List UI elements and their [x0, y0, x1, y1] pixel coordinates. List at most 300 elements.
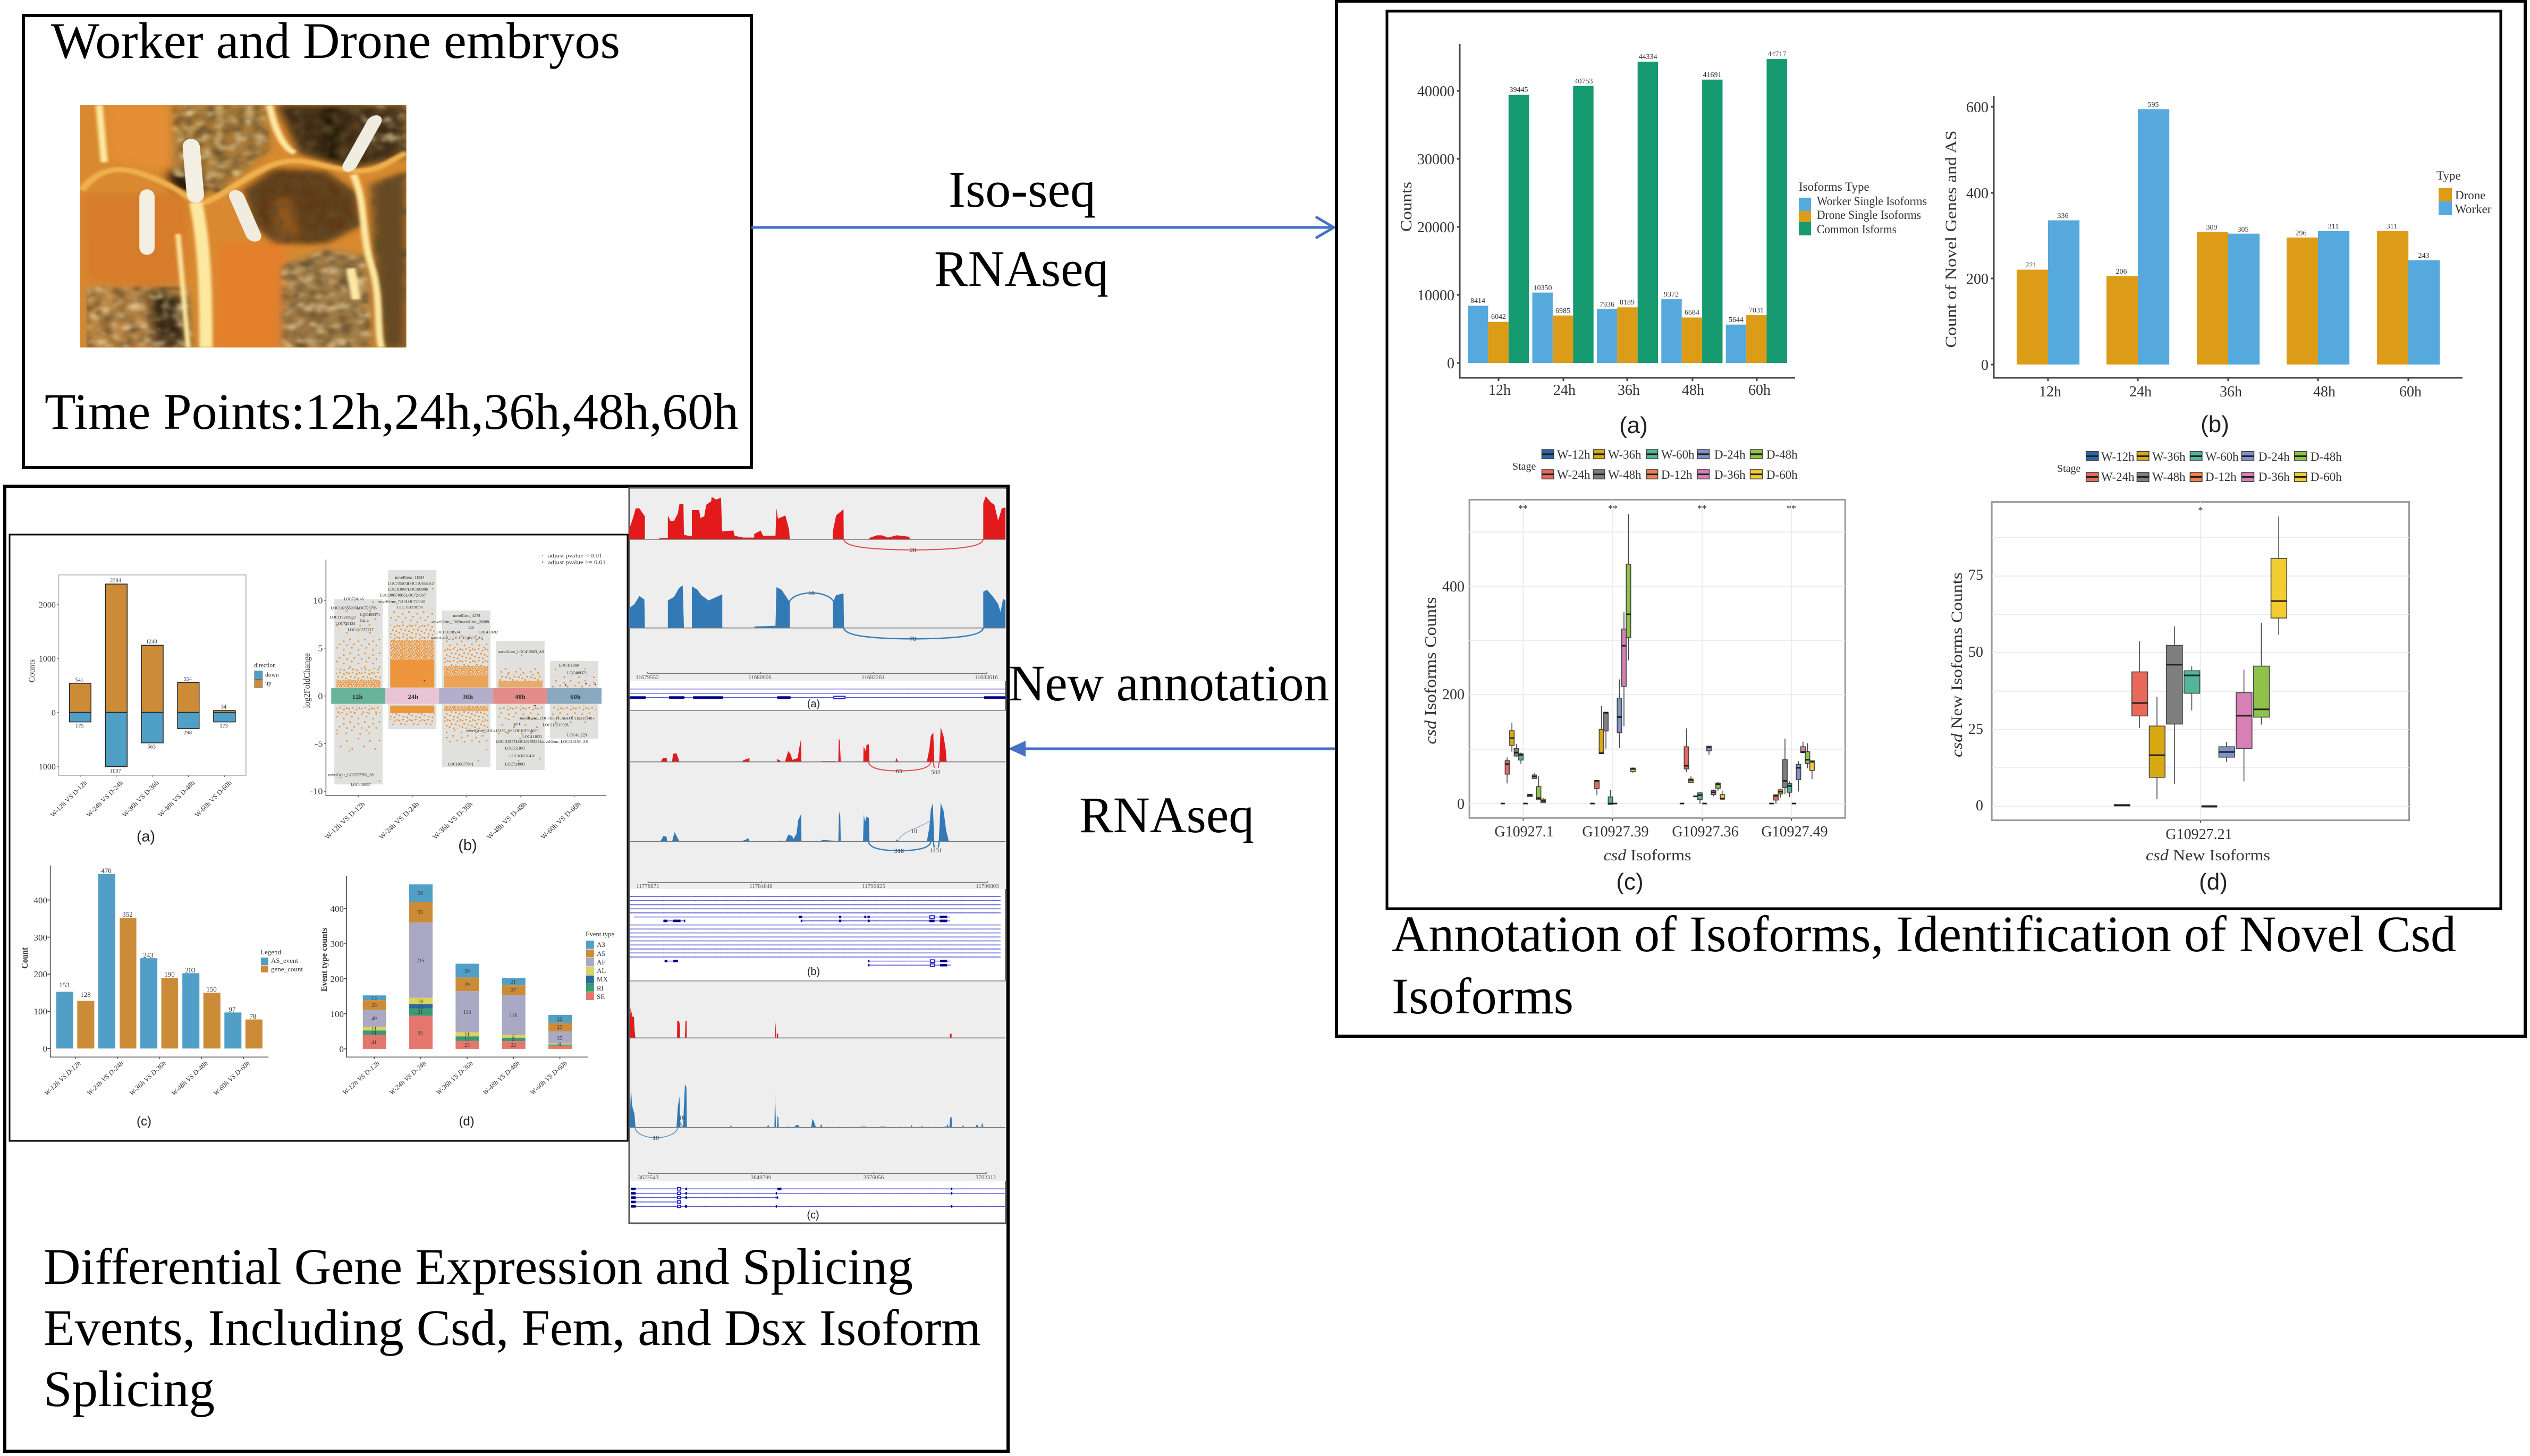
IGV a: sashimi plot csd: 18 [808, 589, 815, 597]
legend: stage c: W-24h [1557, 468, 1590, 481]
chart b: novel genes and AS: 600 [1966, 99, 1989, 116]
chart d: event type counts stacked bars: 12 [464, 1036, 470, 1042]
chart b: volcano scatter of log2FoldChange: -10 [310, 786, 323, 797]
IGV a: sashimi plot csd: 11679552 [636, 674, 659, 681]
chart b: volcano scatter of log2FoldChange: W-12h VS D-12h [323, 800, 367, 841]
IGV c: sashimi plot dsx: 16 [679, 1114, 685, 1121]
chart d: event type counts stacked bars: W-36h VS D-36h [434, 1059, 475, 1096]
legend: type: Type [2436, 169, 2461, 182]
IGV a: sashimi plot csd: 11682261 [861, 674, 885, 681]
legend: stage c: W-60h [1661, 448, 1695, 461]
chart d: event type counts stacked bars: 39 [464, 969, 470, 975]
chart a: up and down counts: 173 [219, 723, 228, 729]
chart a: isoform counts by type: 39445 [1509, 86, 1528, 94]
IGV b: sashimi plot fem: 11790825 [862, 883, 885, 890]
chart c: AS events and gene counts: 243 [143, 951, 154, 959]
IGV c: sashimi plot dsx [629, 1008, 1005, 1221]
chart d: event type counts stacked bars: 12 [418, 1004, 423, 1010]
chart b: novel genes and AS: Count of Novel Genes and AS [1942, 131, 1960, 348]
legend: stage d: D-24h [2258, 450, 2290, 463]
chart d: csd new isoforms boxplot: 25 [1968, 721, 1983, 738]
text: annotation caption: Annotation of Isoforms, Identification of Novel Csd [1392, 905, 2456, 962]
chart b: novel genes and AS: 200 [1966, 271, 1989, 287]
chart a: up and down counts: 34 [221, 705, 226, 710]
legend: AS event and gene count: gene_count [271, 965, 303, 973]
IGV b: sashimi plot fem: 11796803 [976, 883, 999, 890]
IGV a: sashimi plot csd: (a) [807, 698, 820, 710]
chart a: isoform counts by type: 8189 [1620, 299, 1635, 307]
gene labels: TpnT [512, 722, 521, 726]
chart b: volcano scatter of log2FoldChange: 48h [515, 693, 526, 700]
gene labels: LOC411023 [522, 735, 543, 739]
chart c: AS events and gene counts: Count [20, 947, 30, 969]
chart a: up and down counts: 0 [52, 708, 56, 717]
chart c: csd isoforms boxplot: G10927.39 [1582, 824, 1649, 840]
chart d: event type counts stacked bars: 39 [464, 982, 470, 988]
chart d: event type counts stacked bars: 215 [417, 958, 424, 964]
chart b: novel genes and AS: 595 [2148, 101, 2159, 109]
gene labels: LOC113218776 [397, 605, 423, 610]
IGV c: sashimi plot dsx: 3623543 [638, 1174, 659, 1181]
legend: event type: MX [597, 975, 608, 983]
chart d: event type counts stacked bars: 13 [371, 995, 377, 1001]
chart a: up and down counts: W-12h VS D-12h [48, 778, 89, 819]
text: differential expression caption: Splicing [44, 1360, 215, 1417]
label: RNAseq upper: RNAseq [934, 240, 1109, 297]
chart a: isoform counts by type: 44334 [1639, 53, 1657, 61]
chart d: event type counts stacked bars: 300 [331, 939, 344, 949]
chart c: csd isoforms boxplot: ** [1787, 503, 1796, 514]
gene labels: novelGene_LOC728514_ASLOC113219248 [520, 716, 593, 721]
chart b: novel genes and AS: 305 [2237, 226, 2249, 234]
legend: type: Worker [2455, 202, 2492, 216]
chart c: AS events and gene counts: W-60h VS D-60h [211, 1059, 251, 1097]
chart d: event type counts stacked bars: 11 [464, 1032, 470, 1038]
chart a: isoform counts by type: 20000 [1417, 219, 1454, 236]
chart c: AS events and gene counts: 352 [122, 910, 133, 918]
legend: stage c: D-12h [1661, 468, 1693, 481]
chart a: up and down counts: 1000 [39, 763, 56, 772]
chart c: csd isoforms boxplot: ** [1608, 503, 1618, 514]
gene labels: LOC726124 [335, 622, 356, 626]
gene labels: novelGene_LOC552709_AS [328, 773, 374, 777]
chart c: AS events and gene counts: W-12h VS D-12h [43, 1059, 82, 1097]
legend: stage d: Stage [2057, 463, 2081, 475]
chart b: volcano scatter of log2FoldChange: 0 [318, 691, 323, 701]
legend: event type: SE [597, 993, 605, 1001]
legend: AS event and gene count: AS_event [271, 956, 298, 964]
chart d: csd new isoforms boxplot: csd New Isoforms Counts [1948, 572, 1966, 757]
chart a: isoform counts by type: 7031 [1749, 307, 1764, 315]
gene labels: Eth [468, 625, 474, 630]
chart b: novel genes and AS: 36h [2220, 384, 2242, 400]
legend: stage d: W-12h [2101, 450, 2135, 463]
IGV b: sashimi plot fem: 502 [931, 768, 941, 776]
chart c: AS events and gene counts: 97 [229, 1005, 236, 1013]
G10927.49 [1774, 739, 1814, 804]
legend: event type: A3 [597, 941, 605, 949]
gene labels: LOC551883 [505, 747, 525, 751]
chart c: csd isoforms boxplot: G10927.1 [1494, 824, 1554, 840]
chart d: event type counts stacked bars [320, 876, 614, 1129]
chart c: csd isoforms boxplot: G10927.36 [1672, 824, 1739, 840]
chart d: event type counts stacked bars: 116 [510, 1013, 517, 1019]
chart a: isoform counts by type: 9372 [1664, 291, 1679, 299]
IGV a: sashimi plot csd: 11683616 [975, 674, 998, 681]
chart b: novel genes and AS: 12h [2039, 384, 2061, 400]
chart d: event type counts stacked bars: 7 [512, 1034, 514, 1040]
legend: event type: A5 [597, 950, 605, 958]
chart d: csd new isoforms boxplot: G10927.21 [2165, 826, 2232, 843]
gene labels: LOC409371 [567, 671, 587, 675]
gene labels: LOC409371 [360, 613, 380, 617]
chart d: event type counts stacked bars: 27 [511, 988, 516, 994]
IGV a: sashimi plot csd [629, 496, 1005, 710]
chart c: csd isoforms boxplot: 400 [1442, 579, 1465, 595]
text: annotation caption [1392, 905, 2456, 1025]
chart c: AS events and gene counts: W-36h VS D-36h [128, 1059, 167, 1097]
chart c: csd isoforms boxplot: 0 [1457, 796, 1465, 812]
chart c: AS events and gene counts: W-24h VS D-24h [85, 1059, 125, 1097]
chart b: volcano scatter of log2FoldChange [303, 553, 606, 841]
chart c: csd isoforms boxplot: ** [1697, 503, 1707, 514]
legend: event type: AF [597, 958, 606, 966]
gene labels: LOC724993 [505, 763, 525, 766]
legend: stage d: W-36h [2152, 450, 2186, 463]
chart a: isoform counts by type: 40753 [1574, 78, 1593, 86]
chart b: novel genes and AS: 24h [2129, 384, 2152, 400]
chart b: volcano scatter of log2FoldChange: log2FoldChange [303, 653, 312, 708]
legend: event type [586, 930, 614, 1001]
chart d: event type counts stacked bars: 8 [558, 1042, 561, 1048]
chart a: isoform counts by type: 60h [1748, 382, 1771, 399]
legend: isoforms type: Worker Single Isoforms [1817, 194, 1927, 208]
chart b: volcano scatter of log2FoldChange: W-36h VS D-36h [431, 800, 474, 841]
chart a: up and down counts: W-36h VS D-36h [121, 778, 160, 819]
legend: stage c: W-36h [1608, 448, 1641, 461]
chart d: event type counts stacked bars: 118 [463, 1010, 471, 1015]
gene labels: LOC411223 [567, 733, 587, 737]
chart b: novel genes and AS: 296 [2296, 230, 2306, 238]
gene labels: novelGene_4278 [453, 614, 480, 618]
chart d: event type counts stacked bars: 9 [512, 1037, 514, 1043]
IGV c: sashimi plot dsx: 3649799 [751, 1174, 772, 1181]
chart d: event type counts stacked bars: 28 [371, 1003, 377, 1009]
chart c: AS events and gene counts: 128 [80, 991, 91, 998]
legend: stage d: D-36h [2258, 470, 2290, 484]
label: chart b caption: (b) [458, 837, 477, 854]
IGV b: sashimi plot fem: 318 [894, 847, 904, 854]
chart d: event type counts stacked bars: 21 [418, 1010, 423, 1015]
gene labels: novelGene_7210LOC725581 [378, 600, 426, 604]
chart d: csd new isoforms boxplot: 75 [1968, 567, 1983, 583]
chart a: isoform counts by type: 10350 [1534, 284, 1552, 292]
panel: worker and drone embryos [23, 12, 751, 468]
G10927.1 [1505, 723, 1545, 803]
heading: worker and drone embryos: Worker and Drone embryos [51, 12, 620, 69]
legend: stage d: W-24h [2101, 470, 2135, 484]
chart a: isoform counts by type: 24h [1553, 382, 1576, 399]
IGV b: sashimi plot fem: 10 [911, 827, 917, 835]
chart b: volcano scatter of log2FoldChange: W-48h VS D-48h [485, 800, 528, 841]
legend: direction: direction [254, 663, 276, 669]
legend: isoforms type: Drone Single Isoforms [1817, 208, 1921, 222]
text: time points: Time Points:12h,24h,36h,48h,60h [45, 383, 739, 440]
chart c: AS events and gene counts: 78 [250, 1012, 256, 1020]
chart b: volcano scatter of log2FoldChange: -5 [315, 738, 323, 749]
chart a: isoform counts by type: 30000 [1417, 151, 1454, 168]
gene labels: LOC100576418 [509, 754, 536, 758]
chart a: isoform counts by type: 48h [1682, 382, 1704, 399]
text: differential expression caption [44, 1238, 981, 1417]
chart a: up and down counts: (a) [137, 828, 155, 845]
chart d: event type counts stacked bars: 95 [418, 1030, 423, 1036]
chart d: event type counts stacked bars: 400 [331, 904, 344, 914]
legend: event type: AL [597, 967, 606, 975]
legend: stage c: D-36h [1714, 468, 1746, 481]
chart b: volcano scatter of log2FoldChange: W-24h VS D-24h [377, 800, 421, 841]
chart a: isoform counts by type: 10000 [1417, 287, 1454, 304]
gene labels: LOC410087LOC408996 [388, 588, 428, 591]
IGV c: sashimi plot dsx: 3702312 [976, 1174, 996, 1181]
chart b: volcano scatter of log2FoldChange: 60h [570, 693, 581, 700]
chart d: event type counts stacked bars: 22 [557, 1017, 562, 1022]
chart b: novel genes and AS: 336 [2058, 212, 2068, 220]
chart a: isoform counts by type: 12h [1488, 382, 1511, 399]
chart a: up and down counts: W-48h VS D-48h [156, 778, 197, 819]
chart a: isoform counts by type: 8414 [1470, 297, 1485, 305]
gene labels: LOC113218863 [329, 615, 356, 620]
chart a: up and down counts: Counts [28, 659, 37, 682]
chart d: csd new isoforms boxplot: 50 [1968, 644, 1983, 661]
IGV b: sashimi plot fem [629, 727, 1005, 978]
chart b: novel genes and AS: 60h [2399, 384, 2422, 400]
chart a: up and down counts: 1007 [110, 768, 121, 774]
chart d: event type counts stacked bars: W-48h VS D-48h [481, 1059, 521, 1096]
chart d: event type counts stacked bars: 23 [464, 1043, 470, 1048]
legend: stage c: D-48h [1766, 448, 1798, 461]
gene labels: LOC113219028 [543, 723, 569, 727]
chart b: volcano scatter of log2FoldChange: 24h [408, 693, 418, 700]
chart c: AS events and gene counts [20, 866, 303, 1129]
chart c: AS events and gene counts: 0 [43, 1044, 47, 1054]
chart b: novel genes and AS: 311 [2387, 223, 2397, 231]
gene labels: LOC725074LOC102655512 [388, 581, 434, 586]
chart d: event type counts stacked bars: 11 [371, 1026, 377, 1032]
chart c: AS events and gene counts: 150 [206, 985, 217, 993]
chart c: csd isoforms boxplot: (c) [1616, 869, 1644, 895]
IGV b: sashimi plot fem: 1131 [929, 846, 942, 854]
chart a: isoform counts by type: 40000 [1417, 83, 1454, 100]
gene labels: LOC413575LOC102655631novelGene_LOC413159_AS [496, 740, 588, 744]
chart c: AS events and gene counts: W-48h VS D-48h [170, 1059, 209, 1097]
chart b: volcano scatter of log2FoldChange: W-60h VS D-60h [539, 800, 582, 841]
legend: stage c: D-60h [1766, 468, 1798, 481]
chart a: up and down counts: 175 [75, 724, 83, 730]
chart d: event type counts stacked bars: 41 [371, 1040, 377, 1046]
chart c: csd isoforms boxplot [1421, 448, 1845, 895]
legend: direction: down [265, 672, 279, 679]
chart c: AS events and gene counts: 153 [59, 981, 70, 989]
chart d: event type counts stacked bars: 50 [418, 891, 423, 896]
IGV a: sashimi plot csd: 20 [910, 546, 916, 554]
chart b: novel genes and AS [1942, 96, 2492, 437]
legend: stage c [1512, 448, 1798, 481]
legend: isoforms type: Isoforms Type [1799, 180, 1869, 193]
legend: type [2436, 169, 2492, 216]
chart b: novel genes and AS: 400 [1966, 185, 1989, 202]
chart d: csd new isoforms boxplot: (d) [2199, 869, 2228, 895]
chart a: up and down counts: 541 [75, 677, 83, 683]
chart d: event type counts stacked bars: 25 [557, 1025, 562, 1030]
legend: adjust pvalue: adjust pvalue < 0.01 [548, 553, 602, 559]
legend: isoforms type: Common Isforms [1817, 223, 1897, 236]
chart a: isoform counts by type: 6684 [1685, 309, 1699, 317]
chart a: up and down counts: 1248 [146, 639, 157, 645]
legend: event type: RI [597, 984, 604, 992]
chart b: novel genes and AS: 311 [2328, 223, 2339, 231]
chart d: event type counts stacked bars: W-60h VS D-60h [528, 1059, 569, 1096]
chart b: volcano scatter of log2FoldChange: 36h [462, 693, 473, 700]
text: annotation caption: Isoforms [1392, 968, 1573, 1025]
chart d: csd new isoforms boxplot: 0 [1976, 798, 1983, 814]
chart d: event type counts stacked bars: 59 [418, 910, 423, 916]
gene labels: novelGene_1962novelGene_26889 [433, 620, 489, 624]
chart d: event type counts stacked bars: 0 [339, 1044, 344, 1054]
label: RNAseq lower: RNAseq [1079, 786, 1254, 843]
legend: stage d: D-60h [2311, 470, 2342, 484]
chart d: csd new isoforms boxplot [1948, 450, 2409, 895]
IGV c: sashimi plot dsx: 10 [653, 1134, 659, 1141]
legend: AS event and gene count [260, 948, 303, 973]
IGV b: sashimi plot fem: (b) [807, 966, 820, 978]
gene labels: novelGene_LOC113218571_AS [431, 636, 483, 640]
IGV b: sashimi plot fem: 65 [896, 767, 902, 775]
gene labels: LOC102653993LOC726793 [331, 606, 377, 610]
chart b: novel genes and AS: 48h [2313, 384, 2336, 400]
legend: stage d [2057, 450, 2342, 484]
chart d: event type counts stacked bars: 21 [511, 979, 516, 985]
IGV c: sashimi plot dsx: 3676056 [864, 1174, 884, 1181]
chart a: up and down counts: 1000 [39, 655, 56, 664]
chart c: AS events and gene counts: 470 [101, 867, 112, 875]
chart b: novel genes and AS: 221 [2026, 261, 2036, 269]
chart c: AS events and gene counts: 200 [34, 969, 47, 979]
chart c: csd isoforms boxplot: 200 [1442, 687, 1465, 703]
chart a: up and down counts: 2384 [110, 578, 121, 584]
gene labels: novelGene_11834 [395, 575, 425, 580]
gene labels: LOC724146 [344, 597, 364, 601]
chart a: isoform counts by type: (a) [1619, 412, 1648, 438]
chart d: event type counts stacked bars: 35 [557, 1036, 562, 1042]
IGV a: sashimi plot csd: 70 [910, 635, 916, 642]
panel: annotation of isoforms [1336, 1, 2525, 1036]
chart c: csd isoforms boxplot: G10927.49 [1761, 824, 1828, 840]
gene labels: novelGene_LOC413159_ASLOC107964020 [466, 729, 539, 733]
legend: stage d: W-48h [2152, 470, 2186, 484]
chart b: novel genes and AS: (b) [2201, 411, 2229, 437]
chart c: AS events and gene counts: 100 [34, 1006, 47, 1017]
chart b: novel genes and AS: 243 [2418, 252, 2430, 260]
chart d: csd new isoforms boxplot: * [2198, 505, 2203, 515]
chart a: up and down counts [28, 575, 279, 845]
gene labels: Gat-a [360, 619, 369, 623]
chart d: event type counts stacked bars: 22 [511, 1043, 516, 1048]
chart a: isoform counts by type: 0 [1447, 355, 1454, 372]
label: new annotation: New annotation [1009, 655, 1329, 712]
arrow: to annotation panel [751, 217, 1334, 238]
chart d: event type counts stacked bars: (d) [459, 1114, 475, 1129]
chart c: AS events and gene counts: 300 [34, 933, 47, 943]
chart b: volcano scatter of log2FoldChange: 5 [318, 643, 323, 653]
legend: isoforms type [1799, 180, 1927, 236]
legend: stage c: D-24h [1714, 448, 1746, 461]
gene labels: LOC100578955LOC724367 [380, 594, 426, 597]
chart d: event type counts stacked bars: 18 [418, 999, 423, 1005]
chart a: up and down counts: 554 [184, 676, 192, 682]
IGV b: sashimi plot fem: 11778871 [636, 883, 659, 890]
chart a: up and down counts: W-60h VS D-60h [193, 778, 233, 819]
gene labels: LOC409367 [351, 783, 371, 787]
chart c: AS events and gene counts: 400 [34, 895, 47, 905]
IGV a: sashimi plot csd: 11680906 [748, 674, 772, 681]
chart a: isoform counts by type: 7936 [1600, 301, 1614, 309]
chart c: csd isoforms boxplot: ** [1518, 503, 1528, 514]
chart a: up and down counts: 563 [147, 744, 156, 750]
G10927.36 [1684, 729, 1724, 804]
chart c: csd isoforms boxplot: csd Isoforms Counts [1421, 597, 1440, 744]
chart c: AS events and gene counts: (c) [137, 1114, 151, 1129]
legend: adjust pvalue [542, 553, 606, 565]
chart c: csd isoforms boxplot: csd Isoforms [1604, 846, 1691, 864]
legend: direction: up [265, 681, 272, 687]
text: differential expression caption: Events, Including Csd, Fem, and Dsx Isoform [44, 1299, 981, 1356]
chart a: isoform counts by type: Counts [1398, 182, 1415, 232]
chart b: novel genes and AS: 206 [2116, 268, 2127, 276]
chart d: event type counts stacked bars: W-12h VS D-12h [341, 1059, 381, 1096]
gene labels: LOC100577717 [348, 628, 374, 632]
chart a: isoform counts by type: 41691 [1703, 71, 1722, 79]
IGV c: sashimi plot dsx: (c) [807, 1209, 819, 1221]
legend: AS event and gene count: Legend [260, 948, 281, 956]
legend: adjust pvalue: adjust pvalue >= 0.01 [548, 560, 606, 565]
IGV b: sashimi plot fem: 11784848 [749, 883, 773, 890]
chart a: up and down counts: 2000 [39, 601, 56, 610]
chart d: event type counts stacked bars: Event type counts [320, 928, 329, 992]
chart c: AS events and gene counts: 190 [164, 970, 175, 978]
chart d: event type counts stacked bars: 49 [371, 1016, 377, 1022]
G10927.39 [1595, 514, 1635, 805]
chart d: csd new isoforms boxplot: csd New Isoforms [2146, 846, 2270, 864]
chart a: up and down counts: 298 [184, 730, 192, 736]
legend: stage d: D-48h [2311, 450, 2342, 463]
chart b: volcano scatter of log2FoldChange: 10 [313, 595, 323, 605]
chart a: isoform counts by type [1398, 44, 1927, 438]
gene labels: LOC100577041 [448, 763, 474, 767]
legend: stage c: W-12h [1557, 448, 1590, 461]
legend: type: Drone [2455, 189, 2485, 202]
chart b: novel genes and AS: 309 [2206, 224, 2217, 232]
legend: direction [254, 663, 279, 688]
legend: event type: Event type [586, 930, 614, 938]
gene labels: LOC411968 [559, 664, 579, 668]
chart a: isoform counts by type: 5644 [1729, 316, 1744, 324]
chart a: up and down counts: W-24h VS D-24h [84, 778, 125, 819]
gene labels: LOC411692 [478, 630, 498, 634]
arrow: back to differential panel [1008, 741, 1336, 757]
panel: differential gene expression and splicing [5, 486, 1008, 1451]
chart b: volcano scatter of log2FoldChange: 12h [352, 693, 363, 700]
